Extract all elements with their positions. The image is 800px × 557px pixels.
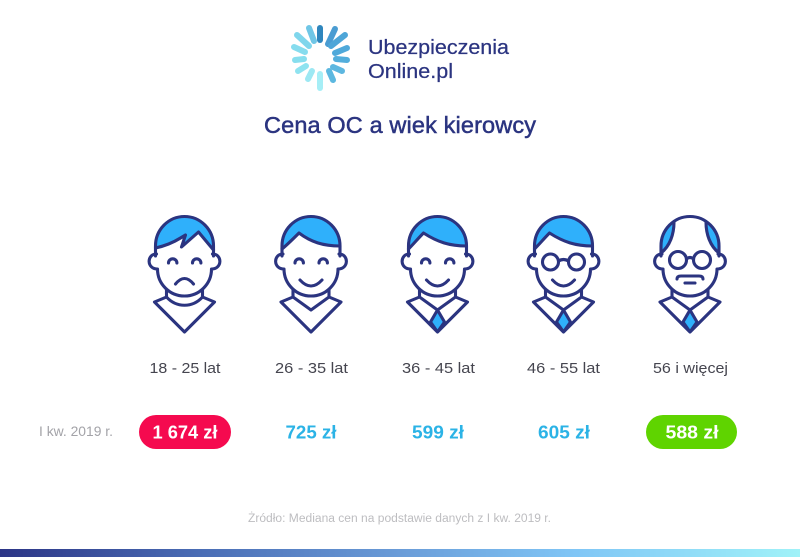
price 18-25: red pill: 1 674 zł	[152, 422, 218, 442]
age labels: 36 - 45 lat	[402, 361, 475, 377]
logo icon	[294, 28, 347, 88]
logo text	[368, 36, 510, 83]
age labels	[150, 361, 728, 377]
age labels: 26 - 35 lat	[275, 361, 348, 377]
age labels: 18 - 25 lat	[150, 361, 220, 377]
icon: driver 56+, balding with glasses	[655, 216, 725, 332]
price 56+: green pill	[646, 415, 737, 449]
icon: driver 26-35, smiling	[276, 216, 346, 332]
age labels: 46 - 55 lat	[527, 361, 600, 377]
row label: I kw. 2019 r.	[39, 424, 113, 439]
price 46-55: 605 zł	[538, 422, 590, 442]
logo text: Ubezpieczenia	[368, 36, 510, 59]
price 18-25: red pill	[139, 415, 231, 449]
logo text: Online.pl	[368, 60, 453, 83]
price 26-35: 725 zł	[286, 422, 336, 442]
bottom gradient bar	[0, 549, 800, 557]
source note: Żródło: Mediana cen na podstawie danych z I kw. 2019 r.	[248, 512, 551, 525]
icon: driver 46-55, glasses and tie	[528, 216, 599, 332]
price 36-45: 599 zł	[412, 422, 464, 442]
icon: driver 18-25, young and frowning	[149, 216, 220, 332]
icon: driver 36-45, smiling with tie	[402, 216, 473, 332]
age labels: 56 i więcej	[653, 361, 728, 377]
title: Cena OC a wiek kierowcy	[264, 112, 536, 138]
price 56+: green pill: 588 zł	[666, 422, 718, 442]
